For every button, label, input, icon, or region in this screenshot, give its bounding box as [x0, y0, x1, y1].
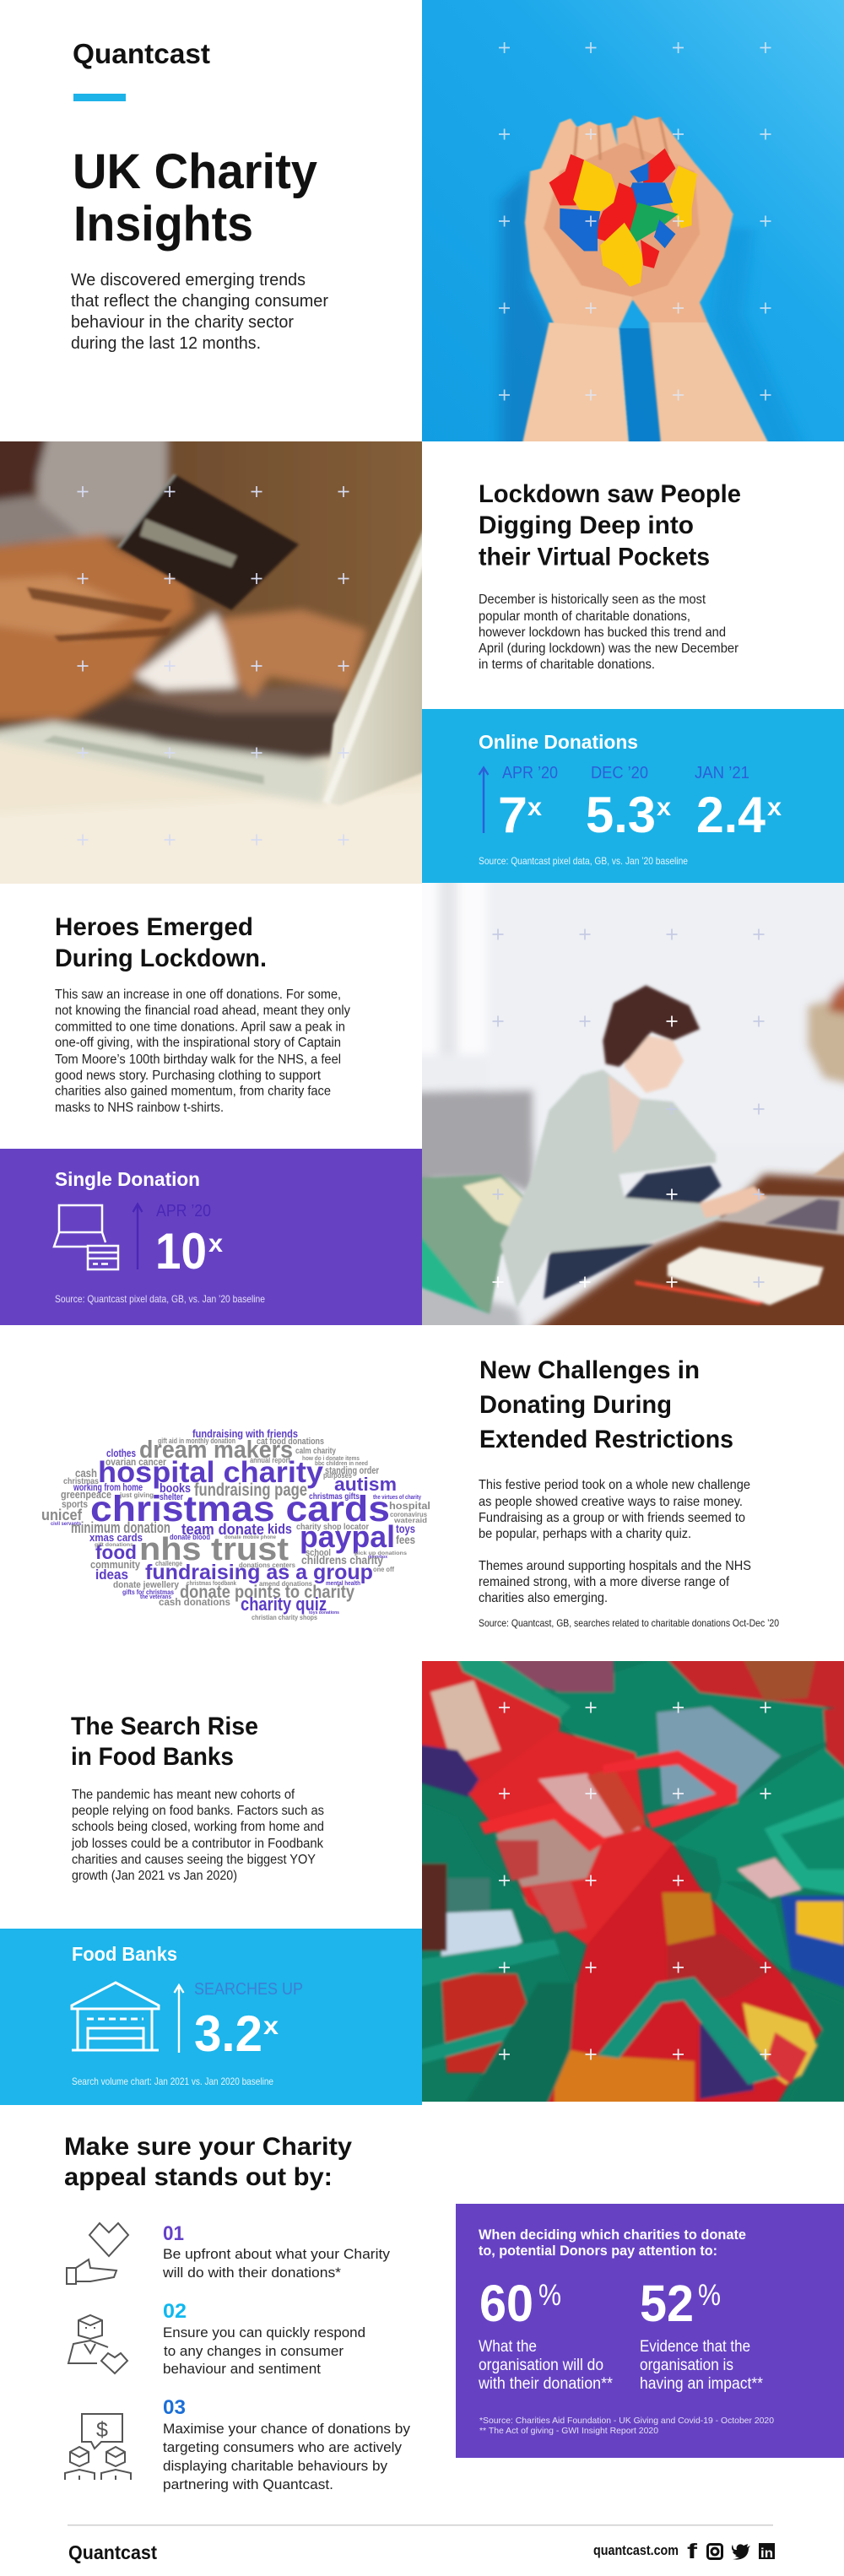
body text: charities also emerging. — [479, 1591, 608, 1605]
stat: January 2021: x — [767, 793, 782, 821]
title: Insights — [73, 197, 253, 252]
icon: two people and donation speech bubble — [65, 2414, 131, 2480]
word cloud: christmas cards — [90, 1489, 390, 1529]
word cloud: community — [90, 1558, 141, 1571]
icon: twitter — [732, 2544, 750, 2560]
stat: searches up: x — [263, 2012, 279, 2040]
intro text: that reflect the changing consumer — [71, 292, 328, 311]
word cloud: toys — [396, 1522, 415, 1535]
icon: linkedin: in — [760, 2546, 773, 2561]
word cloud: gift donations — [95, 1542, 133, 1548]
stat: 60 percent — [478, 2275, 614, 2393]
photo: food bank bags — [422, 1661, 844, 2102]
body text: Tom Moore’s 100th birthday walk for the NHS, a feel — [55, 1053, 341, 1067]
word cloud: wateraid — [393, 1516, 427, 1524]
panel: food banks stat — [0, 1929, 422, 2105]
stat: April 2020 — [155, 1202, 223, 1280]
word cloud: civil servants — [51, 1521, 81, 1527]
word cloud: donate blood — [170, 1533, 210, 1541]
footer — [68, 2540, 775, 2563]
body text: people relying on food banks. Factors such as — [72, 1804, 324, 1818]
stat: April 2020 — [498, 764, 558, 843]
word cloud: sports — [62, 1498, 88, 1510]
word cloud: christmas foodbank — [187, 1581, 236, 1587]
heading: Donating During — [479, 1391, 672, 1419]
arrow: up — [479, 768, 488, 833]
stat: January 2021: 2.4 — [696, 787, 766, 843]
word cloud: fundraising with friends — [192, 1427, 298, 1440]
word cloud: just giving — [119, 1491, 154, 1499]
word cloud: unicef — [41, 1507, 83, 1523]
word cloud: standing order — [325, 1464, 379, 1476]
panel: new challenges — [479, 1356, 779, 1629]
body text: remained strong, with a more diverse range of — [479, 1575, 729, 1589]
stat: December 2020 — [586, 764, 671, 843]
website: quantcast.com — [593, 2542, 679, 2558]
body text: schools being closed, working from home and — [72, 1820, 324, 1834]
body text: December is historically seen as the most — [479, 593, 706, 607]
word cloud: team donate — [181, 1521, 264, 1538]
body text: in terms of charitable donations. — [479, 658, 655, 672]
word cloud: cat food donations — [257, 1437, 324, 1447]
icon: hand and heart — [67, 2223, 128, 2284]
stat: searches up — [194, 1980, 303, 2062]
word cloud: christmas — [63, 1477, 99, 1486]
panel: lockdown virtual pockets — [479, 480, 741, 672]
word cloud: minimum donation — [71, 1519, 170, 1536]
tip 01: 01 — [163, 2222, 184, 2245]
body text: charities and causes seeing the biggest YOY — [72, 1853, 316, 1867]
icon: linkedin — [759, 2543, 775, 2561]
word cloud: calm charity — [295, 1447, 336, 1456]
word cloud: christian charity shops — [252, 1614, 317, 1621]
word cloud: purposes — [323, 1471, 352, 1480]
source: Source: Quantcast pixel data, GB, vs. Jan ’20 baseline — [55, 1293, 265, 1305]
body text: charities also gained momentum, from charity face — [55, 1085, 331, 1099]
tip 03: Maximise your chance of donations by — [163, 2421, 410, 2437]
tip 02: Ensure you can quickly respond — [163, 2324, 365, 2341]
stat: 52 percent: 52 — [640, 2275, 694, 2332]
intro text: We discovered emerging trends — [71, 271, 306, 290]
heading — [479, 480, 741, 571]
word cloud: shelter — [160, 1492, 184, 1502]
icon: facebook: f — [687, 2540, 698, 2563]
word cloud: greenpeace — [61, 1488, 111, 1501]
word cloud: one off — [373, 1565, 394, 1573]
word cloud: xmas cards — [89, 1531, 143, 1544]
body text: masks to NHS rainbow t-shirts. — [55, 1101, 224, 1115]
word cloud: annual report — [250, 1456, 290, 1464]
tip 02 — [163, 2300, 365, 2377]
word cloud: how do i donate items — [302, 1456, 360, 1462]
word cloud: nhs trust — [139, 1532, 289, 1567]
body text: be popular, perhaps with a charity quiz. — [479, 1527, 691, 1541]
body text: job losses could be a contributor in Foodbank — [71, 1837, 324, 1851]
body text — [55, 988, 350, 1115]
heading: Extended Restrictions — [479, 1426, 733, 1453]
word cloud: donate points to charity — [180, 1583, 354, 1602]
panel: online donations — [422, 709, 844, 884]
tip 01: will do with their donations* — [162, 2265, 341, 2281]
stat: April 2020: APR ’20 — [156, 1202, 211, 1220]
heading — [71, 1713, 258, 1771]
grid of plus marks — [499, 42, 771, 400]
panel heading: to, potential Donors pay attention to: — [479, 2243, 717, 2259]
stat: 52 percent: % — [698, 2279, 721, 2312]
source: Source: Quantcast, GB, searches related to charitable donations Oct-Dec ’20 — [479, 1617, 779, 1629]
heading — [55, 913, 267, 972]
stat: 60 percent: with their donation** — [478, 2375, 614, 2393]
body text: as people showed creative ways to raise money. — [479, 1495, 743, 1509]
stat: December 2020: 5.3 — [586, 787, 656, 843]
body text: one-off giving, with the inspirational story of Captain — [55, 1036, 341, 1050]
arrow: up — [174, 1985, 184, 2053]
stat: January 2021 — [695, 764, 782, 843]
body text: good news story. Purchasing clothing to support — [55, 1069, 322, 1083]
panel: single donation — [0, 1149, 422, 1325]
photo: hands holding puzzle heart — [422, 0, 844, 457]
stat: January 2021: JAN ’21 — [695, 764, 749, 782]
word cloud: kids — [268, 1521, 292, 1537]
word cloud: hospital charity — [98, 1456, 324, 1489]
stat: 52 percent: Evidence that the — [640, 2338, 750, 2356]
icon: warehouse — [72, 1983, 159, 2050]
grid of plus marks — [78, 486, 349, 846]
grid of plus marks — [499, 1702, 771, 2059]
body text: however lockdown has bucked this trend and — [479, 625, 726, 640]
stat: December 2020: DEC ’20 — [591, 764, 648, 782]
word cloud: donate jewellery — [113, 1580, 180, 1590]
icon: laptop and card — [54, 1205, 118, 1269]
body text — [71, 1788, 324, 1883]
stat: searches up: SEARCHES UP — [194, 1980, 303, 1999]
word cloud: childrens charity — [301, 1553, 383, 1567]
photo: card payment on laptop — [0, 441, 422, 884]
stat: 52 percent — [640, 2275, 764, 2393]
body text: Themes around supporting hospitals and the NHS — [479, 1559, 751, 1573]
stat: searches up: 3.2 — [194, 2005, 262, 2062]
tip 03 — [163, 2396, 410, 2492]
word cloud: challenge — [155, 1560, 182, 1567]
heading — [479, 1356, 733, 1453]
heading: Digging Deep into — [479, 511, 694, 539]
body text: committed to one time donations. April saw a peak in — [55, 1020, 345, 1035]
word cloud: pick up donations — [354, 1550, 407, 1556]
panel: charity appeal tips — [64, 2133, 410, 2492]
arrow: up — [133, 1204, 142, 1269]
word cloud: fees — [396, 1533, 415, 1546]
heading: Lockdown saw People — [479, 480, 741, 508]
stat: April 2020: APR ’20 — [502, 764, 558, 782]
tip 03: partnering with Quantcast. — [163, 2476, 333, 2492]
body text — [479, 1478, 751, 1605]
photo: woman at laptop — [422, 883, 844, 1325]
heading: Heroes Emerged — [55, 913, 253, 941]
word cloud — [41, 1427, 430, 1621]
word cloud: amend donations — [259, 1580, 313, 1588]
word cloud: the virtues of charity — [373, 1493, 422, 1501]
word cloud: donations centers — [239, 1561, 296, 1569]
panel: intro — [71, 38, 328, 353]
word cloud: charity shop locator — [296, 1523, 369, 1532]
panel: heroes emerged — [55, 913, 350, 1115]
body text: popular month of charitable donations, — [479, 609, 690, 624]
stat: April 2020: 10 — [155, 1223, 207, 1280]
word cloud: mental health — [326, 1579, 360, 1587]
source: Search volume chart: Jan 2021 vs. Jan 2020 baseline — [72, 2075, 273, 2087]
icon: person with heart — [68, 2315, 127, 2373]
word cloud: hospital — [389, 1500, 430, 1512]
heading: The Search Rise — [71, 1713, 258, 1740]
word cloud: autism — [334, 1474, 397, 1495]
accent bar — [73, 94, 126, 101]
tip 03: targeting consumers who are actively — [163, 2439, 402, 2455]
stat: April 2020: 7 — [498, 787, 528, 843]
body text: growth (Jan 2021 vs Jan 2020) — [72, 1869, 237, 1883]
body text: The pandemic has meant new cohorts of — [72, 1788, 295, 1802]
stat: April 2020: x — [208, 1230, 223, 1258]
grid of plus marks — [493, 928, 765, 1288]
panel: food banks search rise — [71, 1713, 324, 1883]
stat: 52 percent: having an impact** — [640, 2375, 764, 2393]
icon: two people and donation speech bubble: $ — [96, 2418, 108, 2442]
word cloud: cash donations — [159, 1596, 230, 1608]
word cloud: paypal — [300, 1519, 395, 1554]
logo: Quantcast: Quantcast — [68, 2541, 157, 2563]
panel heading: When deciding which charities to donate — [479, 2227, 746, 2243]
icon: instagram — [707, 2544, 722, 2559]
stat: 60 percent: % — [538, 2279, 561, 2312]
panel: what donors pay attention to — [456, 2204, 844, 2458]
heading: Make sure your Charity — [64, 2133, 352, 2161]
stat: April 2020: x — [528, 793, 542, 821]
stat: December 2020: x — [657, 793, 671, 821]
word cloud: food — [95, 1541, 137, 1563]
word cloud: ideas — [95, 1567, 128, 1583]
word cloud: donorbox — [368, 1555, 388, 1560]
word cloud: working from home — [73, 1481, 143, 1493]
intro text: during the last 12 months. — [71, 334, 261, 353]
tip 03: 03 — [163, 2396, 186, 2419]
body text: This festive period took on a whole new challenge — [479, 1478, 750, 1492]
stat: 52 percent: organisation is — [640, 2357, 733, 2374]
intro text: behaviour in the charity sector — [71, 313, 294, 332]
word cloud: charity quiz — [241, 1594, 327, 1615]
body text — [479, 593, 739, 672]
heading: in Food Banks — [71, 1743, 234, 1771]
word cloud: ovarian cancer — [106, 1456, 166, 1468]
tip 02: 02 — [163, 2300, 187, 2323]
word cloud: gifts for christmas — [122, 1588, 174, 1596]
word cloud: dream makers — [139, 1437, 293, 1464]
stat: 60 percent: 60 — [479, 2275, 533, 2332]
sources: *Source: Charities Aid Foundation - UK Giving and Covid-19 - October 2020 — [479, 2416, 774, 2426]
heading: During Lockdown. — [55, 944, 267, 972]
tip 02: to any changes in consumer — [164, 2343, 344, 2359]
word cloud: donate mobile phone — [225, 1534, 276, 1540]
tip 01: Be upfront about what your Charity — [163, 2246, 391, 2262]
word cloud: gift aid in monthly donation — [158, 1437, 235, 1445]
word cloud: books — [160, 1481, 191, 1496]
panel heading: Online Donations — [479, 731, 638, 753]
intro text — [71, 271, 328, 353]
word cloud: the veterans — [140, 1594, 171, 1600]
panel heading: Single Donation — [55, 1168, 200, 1190]
word cloud: coronavirus — [390, 1510, 427, 1518]
stat: 60 percent: What the — [479, 2338, 537, 2356]
word cloud: clothes — [106, 1447, 136, 1459]
tip 03: displaying charitable behaviours by — [163, 2458, 387, 2474]
panel heading — [479, 2227, 746, 2259]
body text: April (during lockdown) was the new December — [479, 641, 739, 656]
body text: This saw an increase in one off donations. For some, — [55, 988, 341, 1002]
sources — [479, 2416, 774, 2436]
heading: New Challenges in — [479, 1356, 700, 1384]
word cloud: fundraising page — [194, 1480, 307, 1500]
word cloud: toys donations — [309, 1610, 339, 1615]
title — [73, 144, 317, 252]
body text: not knowing the financial road ahead, meant they only — [55, 1004, 350, 1018]
tip 02: behaviour and sentiment — [163, 2361, 321, 2377]
word cloud: cash — [75, 1466, 97, 1480]
heading: their Virtual Pockets — [479, 544, 710, 571]
heading: appeal stands out by: — [64, 2163, 333, 2191]
logo: Quantcast: Quantcast — [73, 38, 210, 69]
source: Source: Quantcast pixel data, GB, vs. Jan ’20 baseline — [479, 855, 688, 867]
panel heading: Food Banks — [72, 1943, 177, 1965]
word cloud: fundraising as a group — [145, 1561, 373, 1584]
heading — [64, 2133, 352, 2191]
word cloud: christmas gifts — [309, 1492, 360, 1502]
title: UK Charity — [73, 144, 317, 199]
stat: 60 percent: organisation will do — [479, 2357, 603, 2374]
word cloud: school — [306, 1548, 331, 1558]
body text: Fundraising as a group or with friends seemed to — [479, 1511, 745, 1525]
sources: ** The Act of giving - GWI Insight Report 2020 — [479, 2426, 658, 2436]
word cloud: bbc children in need — [315, 1459, 368, 1467]
tip 01 — [162, 2222, 391, 2281]
